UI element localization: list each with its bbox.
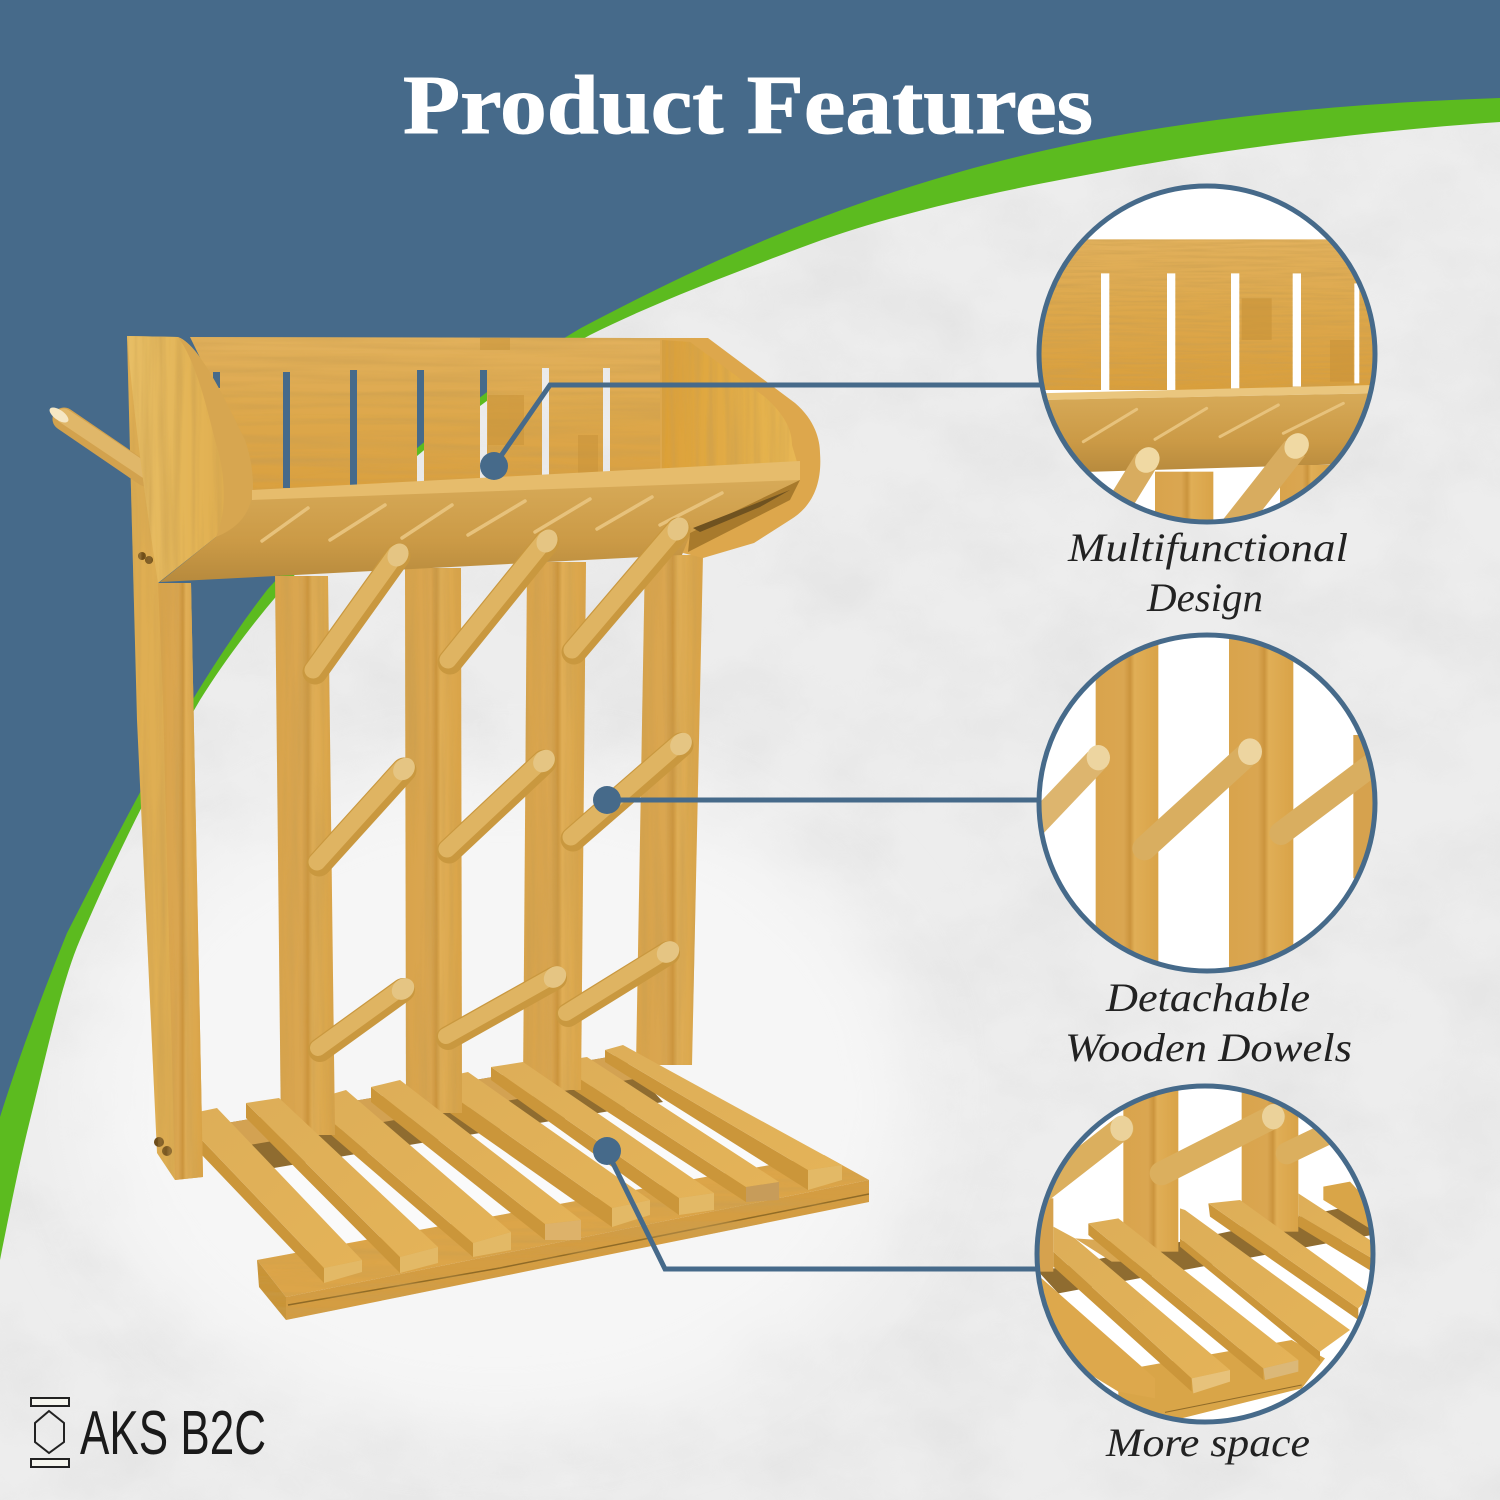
title: Product Features [403,59,1093,152]
label: Multifunctional Design [1067,525,1348,620]
label: Multifunctional Design: Multifunctional [1067,525,1348,570]
white floor under slats [205,1070,850,1280]
board knots [480,338,598,475]
pegs: lower row [318,937,684,1050]
pegs: middle row [317,728,696,864]
detail circle: shelf [1033,186,1383,532]
label: Detachable Wooden Dowels: Wooden Dowels [1065,1025,1352,1070]
front shelf lip [160,461,800,582]
left side panel with curved edge [127,336,253,583]
left dowel [47,405,146,475]
label: Detachable Wooden Dowels [1065,975,1352,1070]
front base board [257,1155,869,1320]
back board with slots [190,337,660,505]
callout connector: top [480,385,1040,480]
logo: AKS B2C [31,1398,266,1468]
callout connector: bottom [593,1137,1037,1269]
label: More space: More space [1105,1420,1310,1465]
bamboo rack product illustration [47,336,869,1320]
right side panel [660,338,820,558]
vertical posts [275,555,703,1135]
callout connector: middle [593,786,1040,814]
label: Detachable Wooden Dowels: Detachable [1105,975,1310,1020]
detail circle: dowels [1032,635,1378,972]
label: Multifunctional Design: Design [1146,575,1263,620]
green swoosh band [0,60,1500,1260]
detail circle: base slats [1035,1082,1375,1422]
pegs: top row [313,514,693,672]
blue header shape [0,0,1500,1117]
back cross bars [215,1055,663,1172]
left upright post [127,336,203,1180]
logo: AKS B2C: AKS B2C [80,1399,266,1468]
floor slats in front of posts [246,1045,842,1273]
floor slats behind posts [179,1057,779,1283]
left panel rounded edge [178,337,253,537]
